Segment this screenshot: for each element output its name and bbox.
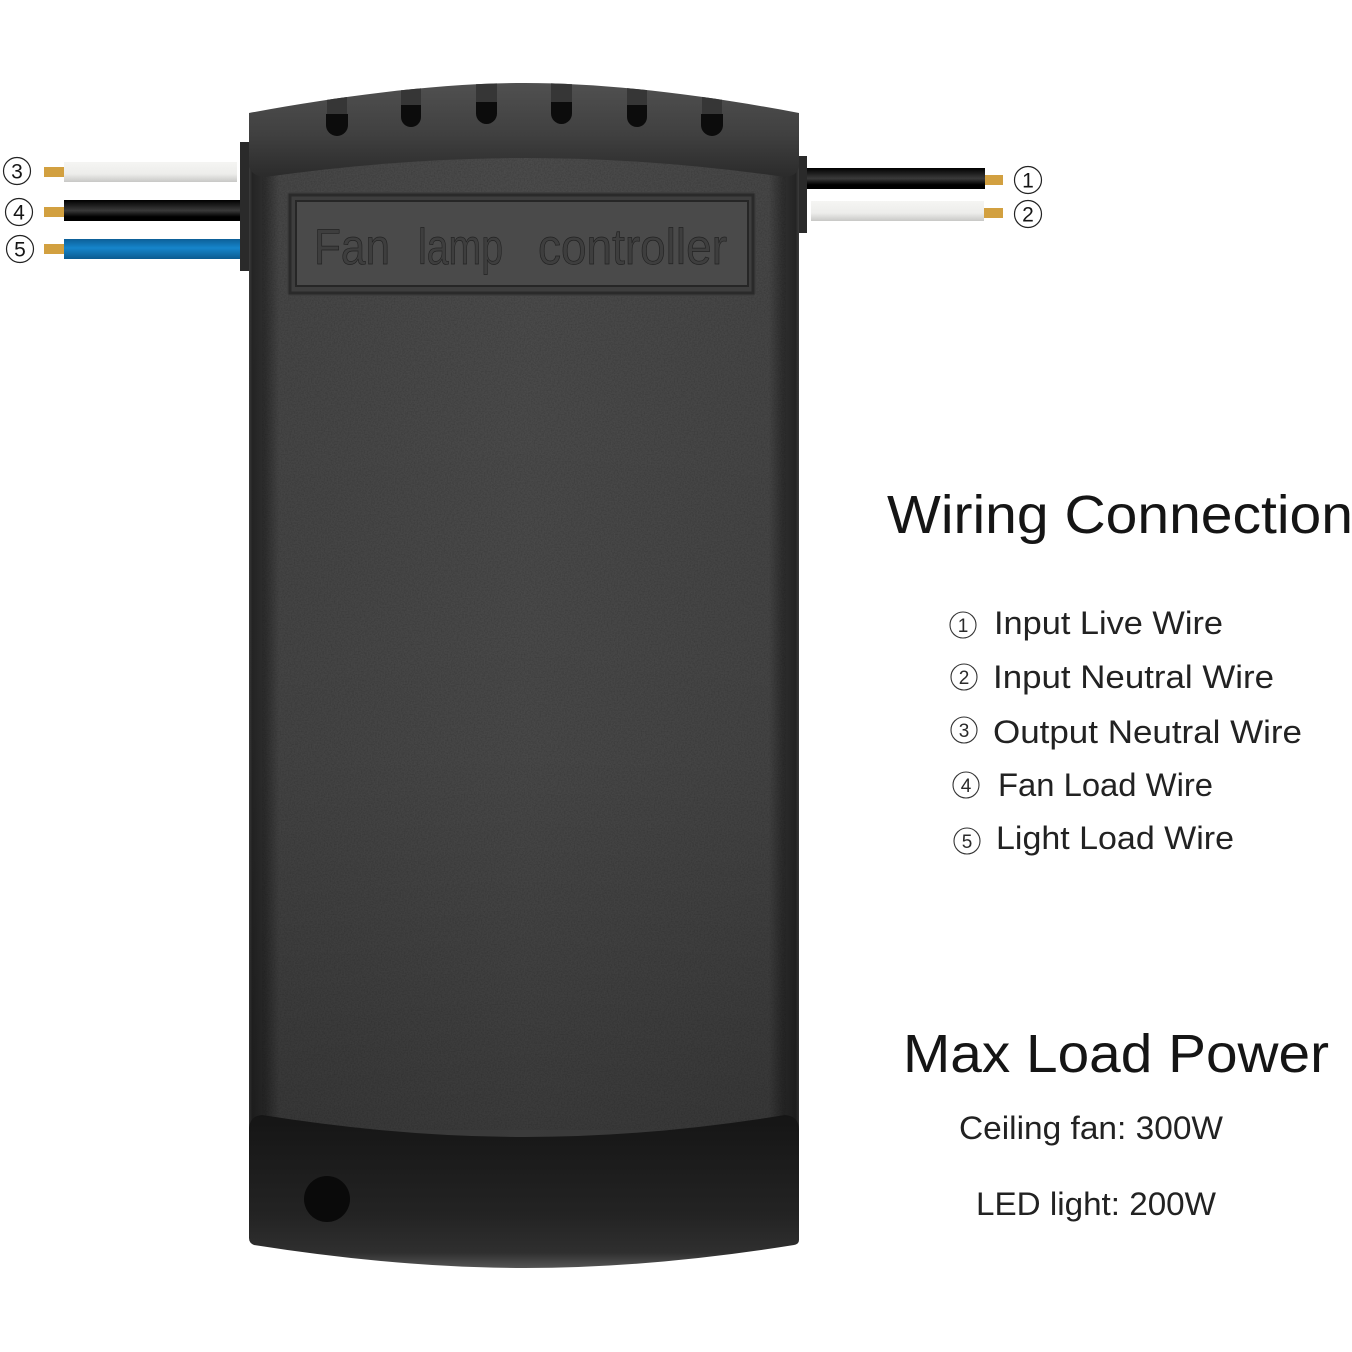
left wires xyxy=(44,162,242,259)
legend item 1: 1 xyxy=(958,616,968,637)
bottom cap xyxy=(249,1115,799,1268)
heading: wiring connection: Wiring Connection xyxy=(887,485,1352,545)
label plate xyxy=(287,192,756,296)
plate text: controller xyxy=(538,219,727,275)
legend item 3: 3 xyxy=(959,721,969,742)
controller device xyxy=(240,80,807,1268)
wire number labels left: 5 xyxy=(14,238,26,262)
plate text: lamp xyxy=(418,219,503,275)
housing body xyxy=(249,140,799,1185)
right wires xyxy=(806,168,1003,221)
side grommets xyxy=(240,142,807,271)
wire number labels left xyxy=(4,158,34,262)
wire number labels right xyxy=(1014,166,1042,228)
wiring legend xyxy=(950,605,1302,856)
legend item 3: Output Neutral Wire xyxy=(993,714,1302,750)
legend item 1: Input Live Wire xyxy=(994,605,1223,641)
legend item 5: 5 xyxy=(962,832,972,853)
indicator hole xyxy=(304,1176,350,1222)
ceiling fan rating: Ceiling fan: 300W xyxy=(959,1110,1223,1146)
wire number labels right: 2 xyxy=(1022,204,1034,226)
legend item 4: 4 xyxy=(961,776,972,797)
heading: max load power: Max Load Power xyxy=(903,1024,1329,1084)
plate text: Fan xyxy=(314,219,390,275)
wire number labels right: 1 xyxy=(1022,170,1034,192)
legend item 2: Input Neutral Wire xyxy=(993,659,1274,695)
legend item 2: 2 xyxy=(959,668,969,689)
top cap with vents xyxy=(249,80,799,177)
led light rating: LED light: 200W xyxy=(976,1186,1216,1222)
wire number labels left: 4 xyxy=(13,202,25,224)
plate text xyxy=(314,219,727,275)
wire number labels left: 3 xyxy=(11,160,23,184)
legend item 5: Light Load Wire xyxy=(996,820,1234,856)
legend item 4: Fan Load Wire xyxy=(998,767,1213,803)
